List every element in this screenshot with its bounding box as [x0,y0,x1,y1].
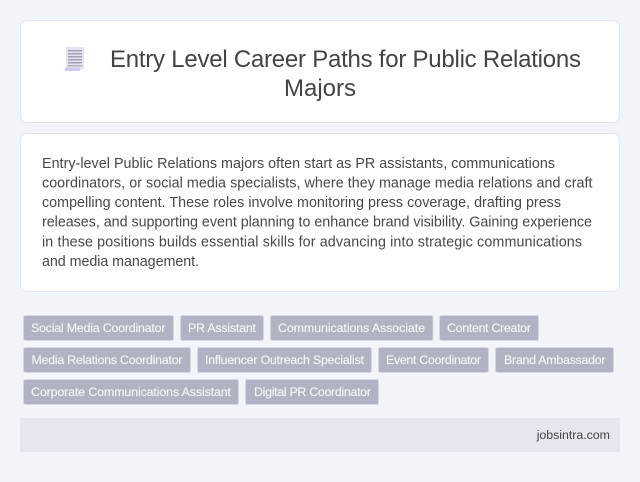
tag: Corporate Communications Assistant: Corporate Communications Assistant [31,385,232,399]
tag: Content Creator: Content Creator [447,321,531,335]
tag: Event Coordinator: Event Coordinator [386,353,481,367]
panel: title card [20,20,620,122]
tag: Digital PR Coordinator [246,380,378,404]
tag: Communications Associate [270,316,433,340]
title [110,46,581,102]
icon: paper scroll [64,47,84,71]
tag list [24,316,614,404]
tag: Media Relations Coordinator [24,348,190,372]
text block: description paragraph: in these positions builds essential skills for advancing into strategic communications [42,234,582,250]
text block: description paragraph: and media management. [42,254,199,270]
tag: Event Coordinator [378,348,488,372]
tag: Media Relations Coordinator: Media Relations Coordinator [32,353,182,367]
footer source text: jobsintra.com [536,428,610,442]
title: Majors [284,75,356,102]
tag: Brand Ambassador [496,348,614,372]
tag: PR Assistant: PR Assistant [188,321,257,335]
tag: Influencer Outreach Specialist [198,348,372,372]
tag: PR Assistant [180,316,264,340]
footer bar [20,418,620,452]
text block: description paragraph: coordinators, or social media specialists, where they manage media relations and craft [42,176,593,192]
panel: description [20,134,620,292]
tag: Brand Ambassador: Brand Ambassador [504,353,606,367]
tag: Social Media Coordinator [24,316,174,340]
text block: description paragraph: releases, and supporting event planning to enhance brand visibility. Gaining experience [42,214,592,230]
text block: description paragraph: compelling content. These roles involve monitoring press coverage, drafting press [42,195,561,211]
tag: Corporate Communications Assistant [24,380,238,404]
tag: Communications Associate: Communications Associate [278,321,425,335]
text block: description paragraph: Entry-level Public Relations majors often start as PR assistants, communications [42,156,555,172]
tag: Social Media Coordinator: Social Media Coordinator [31,321,166,335]
title: Entry Level Career Paths for Public Relations [110,46,581,73]
text block: description paragraph [42,156,593,270]
tag: Influencer Outreach Specialist: Influencer Outreach Specialist [205,353,365,367]
tag: Digital PR Coordinator: Digital PR Coordinator [254,385,371,399]
tag: Content Creator [440,316,538,340]
